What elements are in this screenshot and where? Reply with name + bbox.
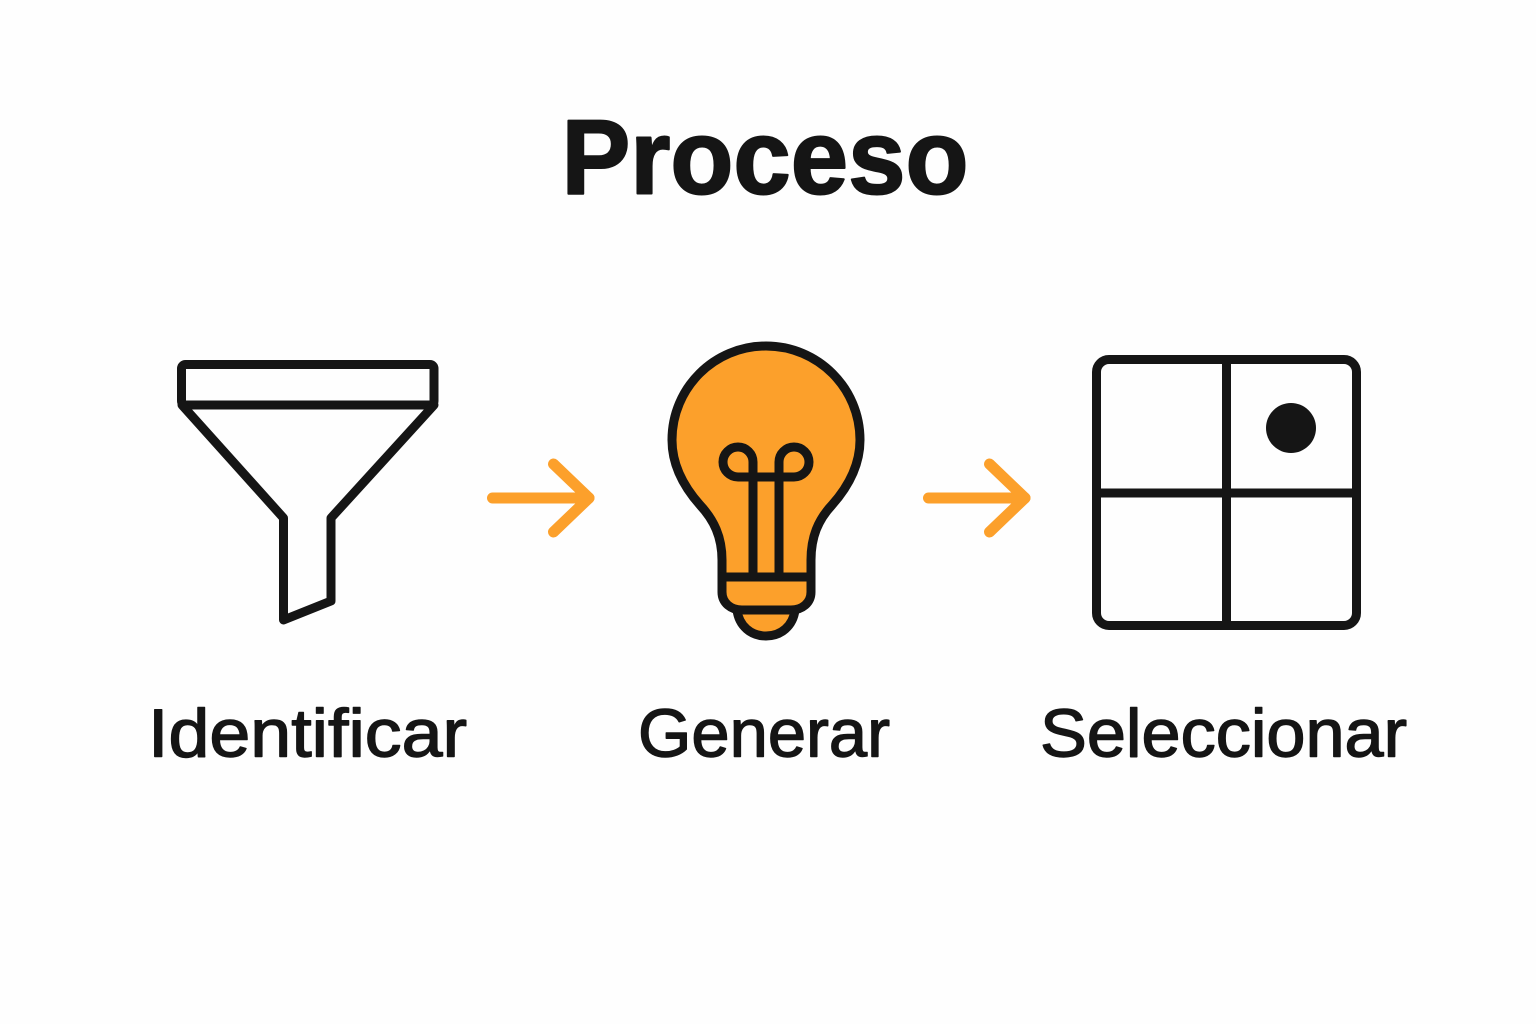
label: Generar: Generar: [638, 696, 890, 772]
title: Proceso: [562, 98, 968, 216]
icon: funnel: [182, 364, 434, 620]
icon: decision grid: [1096, 360, 1356, 626]
label: Seleccionar: Seleccionar: [1040, 696, 1407, 772]
selected dot: [1266, 403, 1316, 453]
arrow: first: [492, 464, 589, 532]
icon: light bulb: [672, 346, 860, 636]
label: Identificar: Identificar: [148, 696, 467, 772]
arrow: second: [928, 464, 1025, 532]
